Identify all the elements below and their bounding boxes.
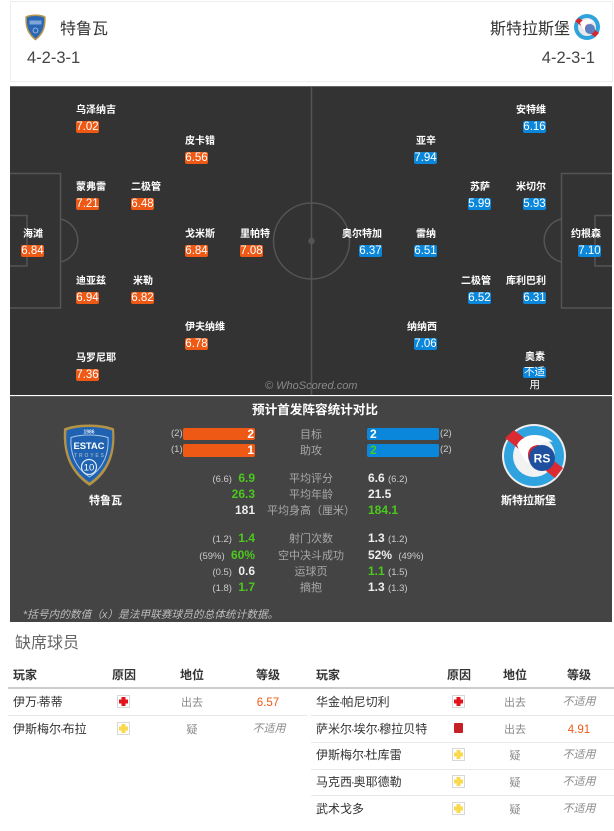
stat row: goals: (2) <box>171 428 183 439</box>
player: 苏萨: 苏萨 <box>470 182 490 193</box>
table: missing players Strasbourg <box>307 660 614 825</box>
label: aerials won: 空中决斗成功 <box>278 550 344 562</box>
team name: Troyes: 特鲁瓦 <box>60 21 108 38</box>
team name: Strasbourg: 斯特拉斯堡 <box>490 21 570 38</box>
player: 马罗尼耶: 马罗尼耶 <box>76 353 116 364</box>
row: 马克西·奥耶德勒: 马克西·奥耶德勒 <box>316 775 402 789</box>
icon: Strasbourg crest: RS <box>534 452 550 466</box>
heading: stats comparison: 预计首发阵容统计对比 <box>252 403 378 417</box>
player: 二极管: 二极管 <box>131 182 161 193</box>
Troyes goals bar <box>183 428 255 440</box>
stat row: assists: (2) <box>440 444 452 455</box>
player: 蒙弗雷 <box>76 181 106 210</box>
stat: shots Troyes: (1.2) 1.4 <box>212 531 255 545</box>
pitch markings <box>10 87 612 395</box>
row: 武术戈多 <box>307 798 614 822</box>
row: 武术戈多: 疑 <box>510 804 520 816</box>
player: 苏萨 <box>468 181 491 210</box>
player: 皮卡错 <box>185 135 215 164</box>
Strasbourg goals bar: 2 <box>370 427 377 441</box>
player: 米切尔 <box>516 181 546 210</box>
Strasbourg goals bar <box>367 428 439 440</box>
row: 华金·帕尼切利: 不适用 <box>562 696 596 708</box>
player: 奥尔特加: 6.37 <box>359 245 382 257</box>
player: 迪亚兹 <box>76 275 106 304</box>
player: 伊夫纳维: 伊夫纳维 <box>185 322 225 333</box>
player: 安特维 <box>516 104 546 133</box>
player: 奥素: 不适 <box>524 366 545 378</box>
player: 约根森 <box>571 228 601 257</box>
player: 苏萨: 5.99 <box>468 198 491 210</box>
stat: average rating Strasbourg: 6.6 (6.2) <box>368 471 408 485</box>
player: 奥尔特加: 奥尔特加 <box>342 229 382 240</box>
player: 迪亚兹: 迪亚兹 <box>76 276 106 287</box>
player: 雷纳: 雷纳 <box>416 229 436 240</box>
header row: 玩家 <box>13 668 37 682</box>
header row: 等级 <box>256 668 280 682</box>
row: 武术戈多: 不适用 <box>562 803 596 815</box>
row: 武术戈多: 武术戈多 <box>316 802 364 816</box>
player: 戈米斯 <box>185 228 215 257</box>
player: 乌泽纳吉 <box>76 104 116 133</box>
label: shots: 射门次数 <box>289 533 333 545</box>
stat row: goals: (2) <box>440 428 452 439</box>
stat: average height Strasbourg: 184.1 <box>368 503 398 517</box>
player: 奥尔特加 <box>342 228 382 257</box>
row: 华金·帕尼切利: 出去 <box>504 697 526 709</box>
player: 里帕特: 7.08 <box>240 245 263 257</box>
player: 海滩: 海滩 <box>23 229 43 240</box>
panel: match header <box>10 1 613 82</box>
player: 雷纳: 6.51 <box>414 245 437 257</box>
Troyes goals bar: 2 <box>247 427 254 441</box>
player: 海滩: 6.84 <box>21 245 44 257</box>
player: 蒙弗雷: 蒙弗雷 <box>76 182 106 193</box>
player: 亚辛: 亚辛 <box>416 136 436 147</box>
panel: lineup stats comparison <box>10 396 612 622</box>
label: goals: 目标 <box>300 429 322 441</box>
label: tackles: 摘抱 <box>300 582 322 594</box>
formation: Troyes: 4-2-3-1 <box>27 49 80 67</box>
stat: dribbles Troyes: (0.5) 0.6 <box>212 564 255 578</box>
icon: Strasbourg crest <box>502 424 566 488</box>
row: 伊斯梅尔·杜库雷: 疑 <box>510 750 520 762</box>
panel: pitch <box>10 86 612 395</box>
player: 奥素: 用 <box>530 379 540 391</box>
player: 纳纳西: 纳纳西 <box>407 322 437 333</box>
player: 米切尔: 5.93 <box>523 198 546 210</box>
stat: average age Troyes: 26.3 <box>232 487 255 501</box>
row: 马克西·奥耶德勒 <box>307 771 614 795</box>
player: 二极管 <box>131 181 161 210</box>
label: dribbles: 运球页 <box>294 566 328 578</box>
player: 米勒: 6.82 <box>131 292 154 304</box>
row: 萨米尔·埃尔·穆拉贝特: 4.91 <box>568 724 590 736</box>
player: 里帕特 <box>240 228 270 257</box>
player: 米切尔: 米切尔 <box>516 182 546 193</box>
row: 华金·帕尼切利 <box>307 690 614 714</box>
stat row: goals <box>171 427 452 441</box>
footnote: *括号内的数值（x）是法甲联赛球员的总体统计数据。 <box>23 609 278 621</box>
header row <box>0 667 307 687</box>
row: 萨米尔·埃尔·穆拉贝特 <box>307 717 614 741</box>
row: 马克西·奥耶德勒: 疑 <box>510 777 520 789</box>
row: 伊斯梅尔·杜库雷: 不适用 <box>562 749 596 761</box>
header row: 玩家 <box>316 668 340 682</box>
stat: dribbles Strasbourg: 1.1 (1.5) <box>368 564 408 578</box>
player: 二极管: 6.52 <box>468 292 491 304</box>
header row <box>307 667 614 687</box>
Strasbourg assists bar <box>367 444 439 457</box>
stat: tackles Strasbourg: 1.3 (1.3) <box>368 580 408 594</box>
player: 马罗尼耶: 7.36 <box>76 369 99 381</box>
stat: average height Troyes: 181 <box>235 503 255 517</box>
icon: Troyes crest small <box>25 14 46 40</box>
icon: Troyes crest: 1986 <box>83 430 95 436</box>
team label: Strasbourg: 斯特拉斯堡 <box>501 495 556 507</box>
player: 米勒: 米勒 <box>133 276 153 287</box>
Troyes assists bar <box>183 444 255 457</box>
player: 里帕特: 里帕特 <box>240 229 270 240</box>
row: 伊斯梅尔·杜库雷: 伊斯梅尔·杜库雷 <box>316 748 402 762</box>
row: 萨米尔·埃尔·穆拉贝特: 萨米尔·埃尔·穆拉贝特 <box>316 722 427 736</box>
formation: Strasbourg: 4-2-3-1 <box>542 49 595 67</box>
row: 伊斯梅尔·布拉: 伊斯梅尔·布拉 <box>13 722 87 736</box>
row: 马克西·奥耶德勒: 不适用 <box>562 776 596 788</box>
player: 伊夫纳维: 6.78 <box>185 338 208 350</box>
icon: Strasbourg crest small <box>574 14 600 40</box>
player: 伊夫纳维 <box>185 321 225 350</box>
watermark: © WhoScored.com <box>265 380 357 392</box>
player: 马罗尼耶 <box>76 352 116 381</box>
player: 二极管: 二极管 <box>461 276 491 287</box>
player: 蒙弗雷: 7.21 <box>76 198 99 210</box>
row: 伊万·蒂蒂: 伊万·蒂蒂 <box>13 695 63 709</box>
header row: 原因 <box>447 668 471 682</box>
player: 皮卡错: 6.56 <box>185 152 208 164</box>
label: average height: 平均身高（厘米） <box>267 505 355 517</box>
heading: missing players: 缺席球员 <box>15 635 79 652</box>
header row: 等级 <box>567 668 591 682</box>
player: 纳纳西 <box>407 321 437 350</box>
stat row: assists <box>171 443 452 457</box>
player: 乌泽纳吉: 7.02 <box>76 121 99 133</box>
player: 库利巴利 <box>506 275 546 304</box>
player: 安特维: 安特维 <box>516 105 546 116</box>
player: 奥素: 奥素 <box>525 352 545 363</box>
row: 伊万·蒂蒂 <box>0 690 307 714</box>
player: 雷纳 <box>414 228 437 257</box>
stat row: assists: (1) <box>171 444 183 455</box>
label: assists: 助攻 <box>300 445 322 457</box>
player: 二极管: 6.48 <box>131 198 154 210</box>
stat: aerials Strasbourg: 52% (49%) <box>368 548 424 562</box>
icon: Troyes crest: TROYES <box>74 453 105 459</box>
player: 库利巴利: 6.31 <box>523 292 546 304</box>
player: 库利巴利: 库利巴利 <box>506 276 546 287</box>
row: 伊万·蒂蒂: 6.57 <box>257 697 279 709</box>
header row: 地位 <box>503 668 527 682</box>
stat: average rating Troyes: (6.6) 6.9 <box>212 471 255 485</box>
player: 乌泽纳吉: 乌泽纳吉 <box>76 105 116 116</box>
icon: Troyes crest <box>64 424 114 486</box>
row: 萨米尔·埃尔·穆拉贝特: 出去 <box>504 724 526 736</box>
player: 亚辛: 7.94 <box>414 152 437 164</box>
Troyes assists bar: 1 <box>247 443 254 457</box>
row: 伊万·蒂蒂: 出去 <box>181 697 203 709</box>
player: 戈米斯: 6.84 <box>185 245 208 257</box>
player: 皮卡错: 皮卡错 <box>185 136 215 147</box>
stat: tackles Troyes: (1.8) 1.7 <box>212 580 255 594</box>
player: 海滩 <box>21 228 44 257</box>
player: 迪亚兹: 6.94 <box>76 292 99 304</box>
row: 伊斯梅尔·布拉 <box>0 717 307 741</box>
header row: 原因 <box>112 668 136 682</box>
row: 伊斯梅尔·布拉: 疑 <box>186 724 198 736</box>
player: 亚辛 <box>414 135 437 164</box>
player: 二极管 <box>461 275 491 304</box>
row: 伊斯梅尔·布拉: 不适用 <box>252 723 286 735</box>
player: 奥素 <box>523 351 546 391</box>
icon: Troyes crest: ESTAC <box>74 441 105 452</box>
label: average age: 平均年龄 <box>289 489 333 501</box>
Strasbourg assists bar: 2 <box>370 443 377 457</box>
player: 安特维: 6.16 <box>523 121 546 133</box>
team label: Troyes: 特鲁瓦 <box>89 495 122 507</box>
player: 约根森: 7.10 <box>578 245 601 257</box>
header row: 地位 <box>180 668 204 682</box>
table: missing players Troyes <box>8 668 307 736</box>
row: 华金·帕尼切利: 华金·帕尼切利 <box>316 695 390 709</box>
player: 米勒 <box>131 275 154 304</box>
player: 戈米斯: 戈米斯 <box>185 229 215 240</box>
player: 纳纳西: 7.06 <box>414 338 437 350</box>
stat: aerials Troyes: (59%) 60% <box>199 548 255 562</box>
stat: shots Strasbourg: 1.3 (1.2) <box>368 531 408 545</box>
player: 约根森: 约根森 <box>571 229 601 240</box>
icon: Troyes crest: 10 <box>84 462 94 474</box>
label: average rating: 平均评分 <box>289 473 333 485</box>
stat: average age Strasbourg: 21.5 <box>368 487 391 501</box>
row: 伊斯梅尔·杜库雷 <box>307 744 614 768</box>
